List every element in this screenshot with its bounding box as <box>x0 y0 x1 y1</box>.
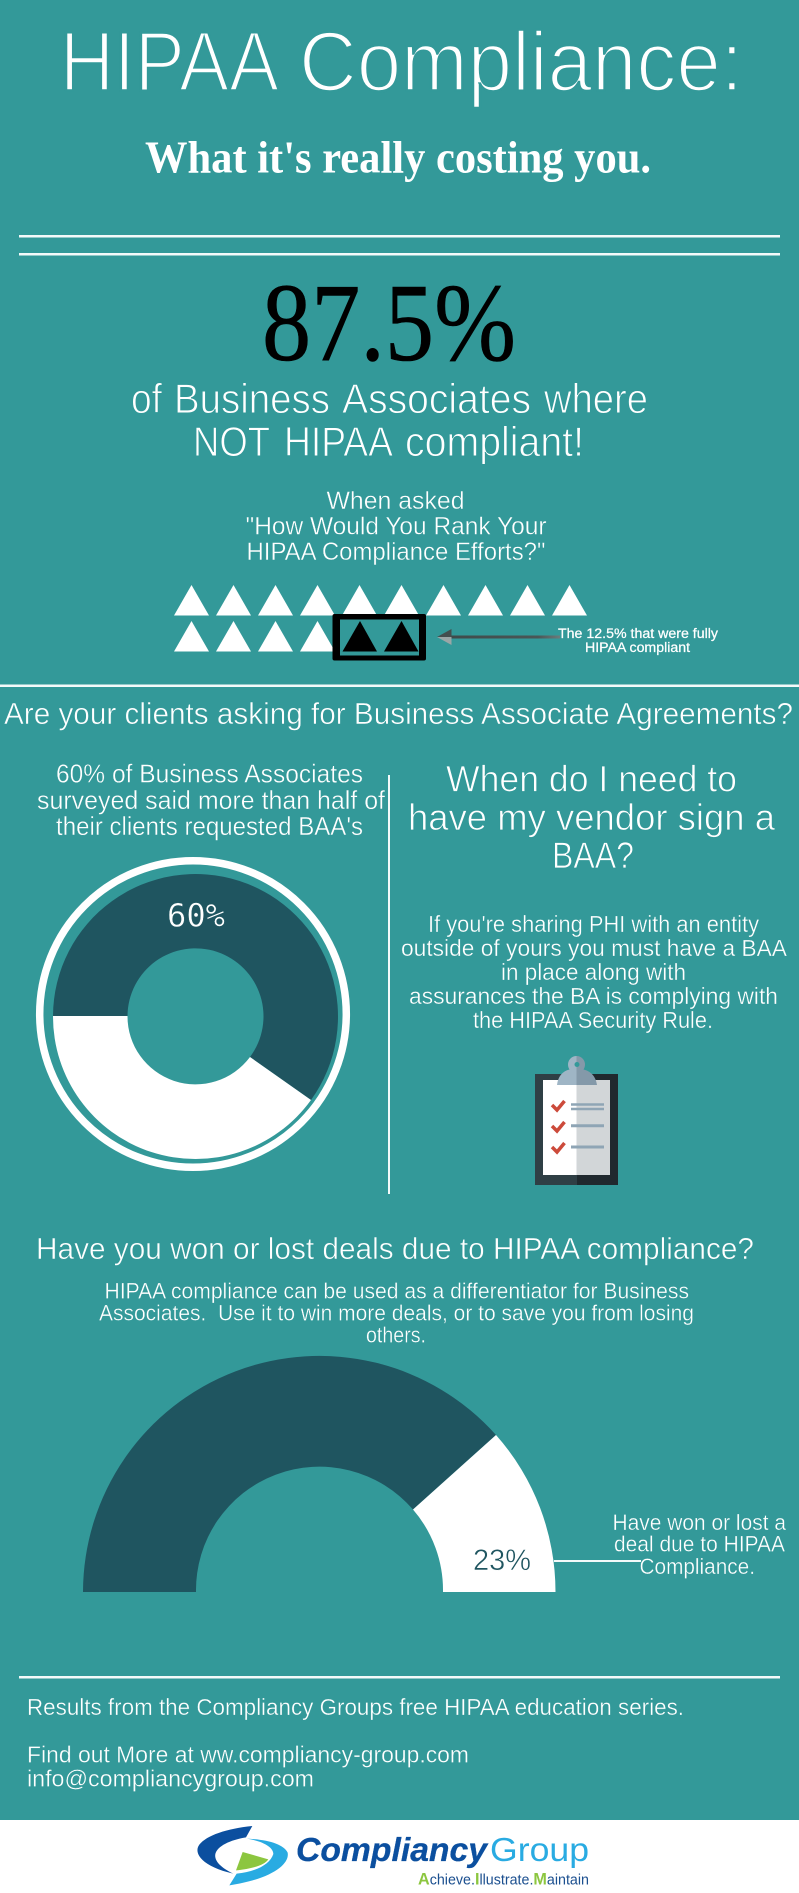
vendor text: the HIPAA Security Rule. <box>473 1007 713 1033</box>
vendor heading: have my vendor sign a <box>408 797 775 838</box>
vendor heading <box>408 758 775 876</box>
icon: clipboard <box>535 1056 618 1185</box>
title: Compliance: <box>299 14 743 108</box>
statistic caption <box>131 375 648 465</box>
chart callout <box>612 1510 787 1579</box>
deals text: others. <box>366 1322 426 1348</box>
arrow <box>437 629 560 645</box>
footer text: Find out More at ww.compliancy-group.com <box>27 1742 469 1768</box>
logo wordmark: Group <box>490 1831 589 1868</box>
panel: vendor BAA <box>401 758 788 1185</box>
vendor text: in place along with <box>501 959 686 985</box>
vendor text: If you're sharing PHI with an entity <box>428 911 759 937</box>
title <box>60 14 743 108</box>
statistic caption: compliant! <box>405 418 584 465</box>
leader line <box>554 1560 641 1562</box>
vendor text: outside of yours you must have a BAA <box>401 935 788 961</box>
callout: 12.5 percent: HIPAA compliant <box>585 640 690 655</box>
logo tagline: Achieve.Illustrate.Maintain <box>418 1870 589 1888</box>
donut chart <box>40 861 346 1167</box>
deals text <box>99 1278 694 1348</box>
statistic caption: where <box>543 375 648 422</box>
callout: 12.5 percent: The 12.5% that were fully <box>558 626 718 641</box>
footer text <box>27 1694 684 1792</box>
survey text <box>37 758 386 841</box>
chart callout: deal due to HIPAA <box>614 1532 785 1557</box>
23 percent label: 23% <box>473 1544 531 1577</box>
survey question: HIPAA Compliance Efforts?" <box>246 538 546 566</box>
statistic caption: HIPAA <box>284 418 393 465</box>
logo wordmark <box>296 1831 589 1868</box>
survey text: 60% of Business Associates <box>56 758 363 788</box>
survey question: "How Would You Rank Your <box>246 512 546 540</box>
survey text: their clients requested BAA's <box>56 811 363 841</box>
statistic caption: NOT <box>193 418 270 465</box>
statistic caption: Associates <box>342 375 531 422</box>
white footer band <box>0 1820 799 1893</box>
chart callout: Have won or lost a <box>612 1510 787 1535</box>
statistic caption: of <box>131 375 162 422</box>
big number: 87.5% <box>262 262 516 385</box>
footer text: Results from the Compliancy Groups free HIPAA education series. <box>27 1694 684 1720</box>
callout: 12.5 percent <box>558 626 718 655</box>
survey question: When asked <box>326 487 464 515</box>
survey text: surveyed said more than half of <box>37 785 386 815</box>
vendor heading: When do I need to <box>446 758 737 800</box>
donut label: 60% <box>167 896 225 934</box>
panel: BAA requests <box>37 758 386 1167</box>
logo mark <box>197 1826 288 1885</box>
vendor heading: BAA? <box>552 835 634 876</box>
chart callout: Compliance. <box>640 1554 755 1579</box>
panel: 87.5 percent statistic <box>131 262 648 566</box>
deals text: HIPAA compliance can be used as a differentiator for Business <box>104 1278 689 1304</box>
deals text: Associates. Use it to win more deals, or to save you from losing <box>99 1300 694 1326</box>
title: HIPAA <box>60 14 279 108</box>
logo <box>197 1826 589 1888</box>
survey question <box>246 487 546 566</box>
vendor text <box>401 911 788 1033</box>
white triangles <box>174 585 587 652</box>
heading: won or lost deals: Have you won or lost deals due to HIPAA compliance? <box>36 1231 754 1266</box>
subtitle: What it's really costing you. <box>145 132 651 182</box>
footer text: info@compliancygroup.com <box>27 1766 314 1792</box>
triangle pictogram <box>174 585 587 660</box>
vendor text: assurances the BA is complying with <box>409 983 778 1009</box>
statistic caption: Business <box>174 375 330 422</box>
semi-donut chart <box>83 1356 556 1592</box>
black highlight box <box>332 614 426 660</box>
logo wordmark: Compliancy <box>296 1831 489 1868</box>
